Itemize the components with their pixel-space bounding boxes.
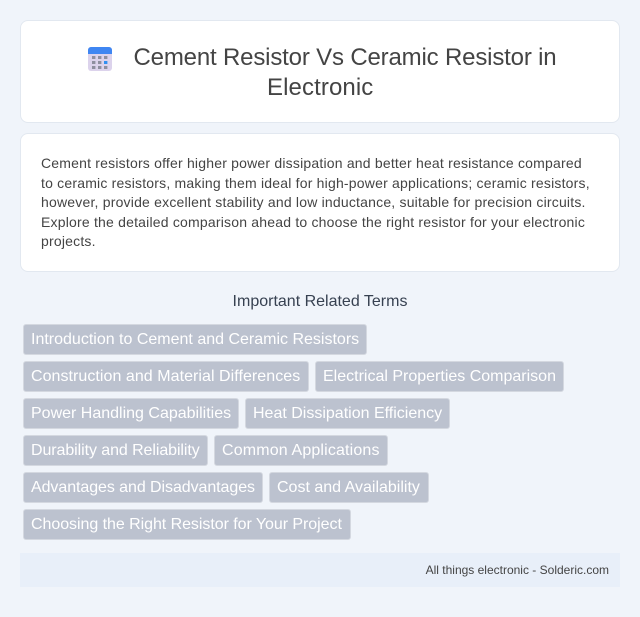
footer bar: [20, 553, 620, 587]
related terms heading: Important Related Terms: [233, 293, 407, 310]
tag: Durability and Reliability: [31, 442, 200, 459]
tag: Electrical Properties Comparison: [323, 368, 556, 385]
tag: [23, 398, 239, 429]
summary text: projects.: [41, 233, 96, 249]
summary text: to ceramic resistors, making them ideal for high-power applications; ceramic resistors,: [41, 175, 590, 191]
tag: [23, 509, 351, 540]
tag: Heat Dissipation Efficiency: [253, 405, 442, 422]
tag: Cost and Availability: [277, 479, 420, 496]
tag: [23, 324, 367, 355]
title: Cement Resistor Vs Ceramic Resistor in: [134, 44, 556, 71]
tag: Choosing the Right Resistor for Your Project: [31, 516, 342, 533]
tag: [245, 398, 450, 429]
tag: Introduction to Cement and Ceramic Resistors: [31, 331, 359, 348]
tag: [315, 361, 564, 392]
tag: Power Handling Capabilities: [31, 405, 231, 422]
title: Electronic: [267, 74, 373, 101]
tag: [23, 472, 263, 503]
summary text: [41, 155, 590, 249]
summary text: however, provide excellent stability and low inductance, suitable for precision circuits.: [41, 194, 586, 210]
tag: Construction and Material Differences: [31, 368, 300, 385]
tag: [269, 472, 429, 503]
header panel: [20, 20, 620, 123]
tag: [23, 361, 309, 392]
summary text: Cement resistors offer higher power dissipation and better heat resistance compared: [41, 155, 582, 171]
tag: Advantages and Disadvantages: [31, 479, 255, 496]
icon: calendar grid: [88, 47, 112, 71]
summary text: Explore the detailed comparison ahead to choose the right resistor for your electronic: [41, 214, 585, 230]
tag: [23, 435, 208, 466]
tag: Common Applications: [222, 442, 380, 459]
footer text: All things electronic - Solderic.com: [426, 563, 609, 577]
summary panel: [20, 133, 620, 272]
tag: [214, 435, 388, 466]
title: [134, 44, 556, 101]
